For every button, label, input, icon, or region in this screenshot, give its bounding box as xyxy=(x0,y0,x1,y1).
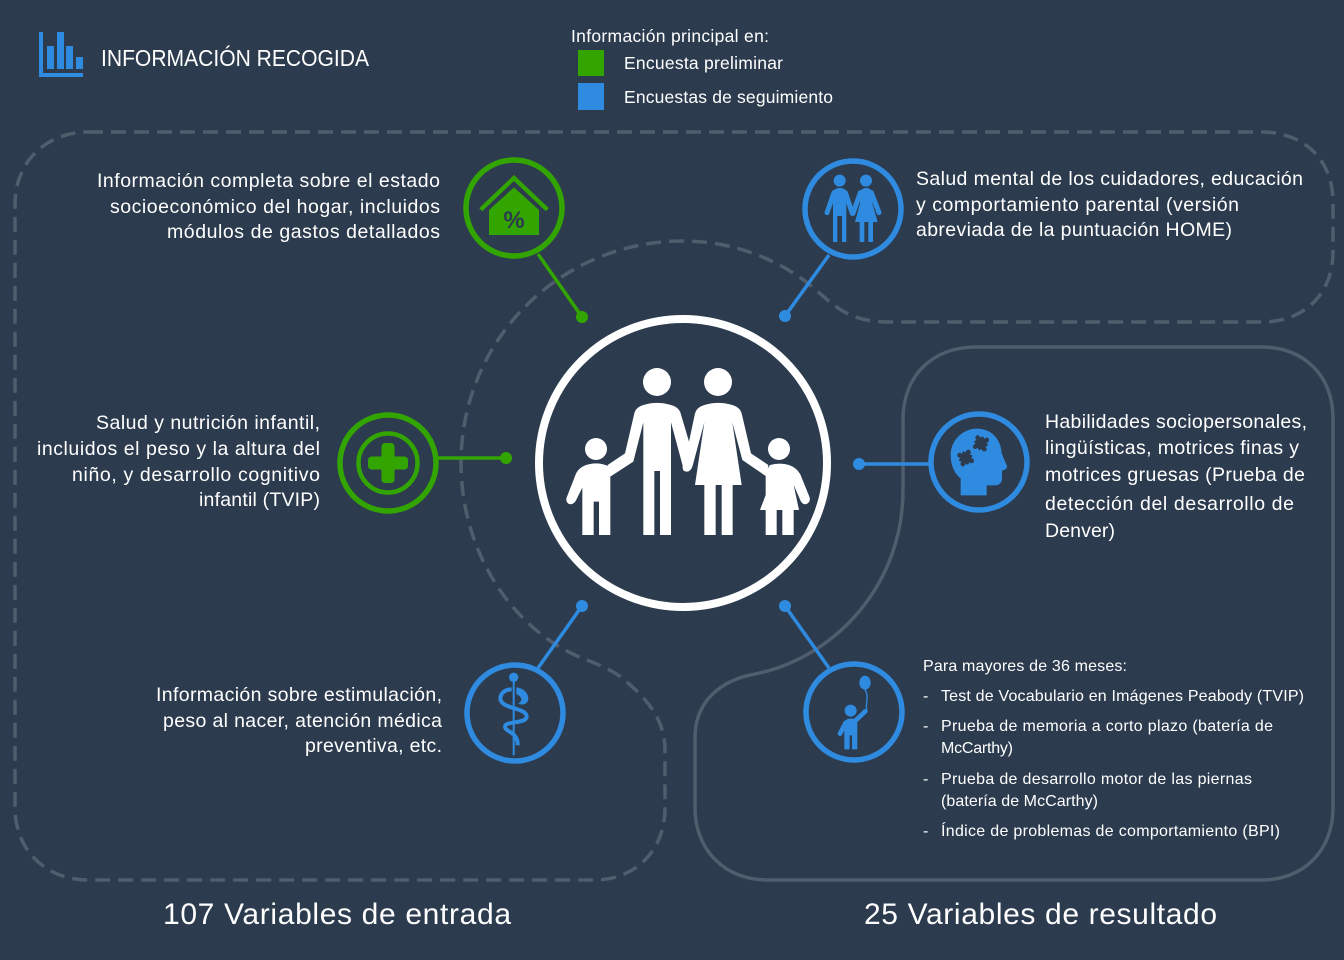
caption: outcome variables: 25 Variables de resultado xyxy=(864,898,1217,931)
connector dot xyxy=(576,600,588,612)
icon ring xyxy=(467,665,563,761)
text: caregivers info xyxy=(916,168,1303,241)
node: child health (green) xyxy=(340,415,512,511)
list item: BPI: - xyxy=(923,823,928,840)
icon ring xyxy=(340,415,436,511)
text: child health info xyxy=(37,412,320,511)
text: stimulation info xyxy=(156,684,442,757)
text: socio-personal skills info: lingüísticas, motrices finas y xyxy=(1045,437,1299,459)
text: socio-personal skills info: motrices gruesas (Prueba de xyxy=(1045,464,1305,486)
list item: memory test xyxy=(923,718,1273,757)
icon: house with percent xyxy=(481,178,547,235)
connector xyxy=(538,254,582,317)
connector xyxy=(538,606,582,668)
icon: staff with serpent xyxy=(500,673,528,755)
icon: child with balloon xyxy=(840,676,871,749)
icon ring xyxy=(931,414,1027,510)
list item: memory test: - xyxy=(923,718,928,735)
legend label: follow-up: Encuestas de seguimiento xyxy=(624,87,833,107)
connector xyxy=(859,462,930,466)
caption: input variables: 107 Variables de entrada xyxy=(163,898,511,931)
node: socio-personal skills (blue) xyxy=(853,414,1027,510)
icon ring xyxy=(806,664,902,760)
text: stimulation info: preventiva, etc. xyxy=(305,735,442,757)
text: stimulation info: peso al nacer, atención médica xyxy=(163,710,442,732)
text: caregivers info: Salud mental de los cuidadores, educación xyxy=(916,168,1303,190)
icon ring xyxy=(466,160,562,256)
central circle xyxy=(539,319,827,607)
text: socio-personal skills info: detección del desarrollo de xyxy=(1045,493,1294,515)
connector dot xyxy=(853,458,865,470)
text: household info: socioeconómico del hogar, incluidos xyxy=(110,196,440,218)
legend xyxy=(571,26,833,110)
text: child health info: incluidos el peso y la altura del xyxy=(37,438,320,460)
icon ring xyxy=(805,161,901,257)
icon: couple xyxy=(827,175,879,242)
connector dot xyxy=(500,452,512,464)
connector dot xyxy=(779,310,791,322)
dashed outline: input variables region xyxy=(15,132,1333,880)
legend heading: Información principal en: xyxy=(571,26,769,46)
connector dot xyxy=(576,311,588,323)
text: caregivers info: abreviada de la puntuación HOME) xyxy=(916,219,1232,241)
node: stimulation (blue) xyxy=(467,600,588,761)
icon: head with puzzle pieces xyxy=(951,429,1007,495)
text: household info: Información completa sobre el estado xyxy=(97,170,440,192)
list heading: Para mayores de 36 meses: xyxy=(923,658,1127,675)
legend swatch: green xyxy=(578,50,604,76)
list item: memory test: McCarthy) xyxy=(941,740,1013,757)
text: child health info: niño, y desarrollo cognitivo xyxy=(72,464,320,486)
text: child health info: infantil (TVIP) xyxy=(199,489,320,511)
icon: medical cross xyxy=(358,434,418,492)
connector xyxy=(785,606,829,668)
list item: TVIP: Test de Vocabulario en Imágenes Peabody (TVIP) xyxy=(941,688,1304,705)
text: socio-personal skills info: Habilidades sociopersonales, xyxy=(1045,411,1307,433)
central family icon xyxy=(539,319,827,607)
solid outline: outcome variables region xyxy=(695,347,1333,880)
text: outcomes list xyxy=(923,658,1304,840)
list item: TVIP: - xyxy=(923,688,928,705)
text: child health info: Salud y nutrición infantil, xyxy=(96,412,320,434)
text: socio-personal skills info xyxy=(1045,411,1307,542)
text: household info xyxy=(97,170,440,243)
node: children over 36 months (blue) xyxy=(779,600,902,760)
legend swatch: blue xyxy=(578,83,604,110)
family figures xyxy=(566,368,810,535)
text: socio-personal skills info: Denver) xyxy=(1045,520,1115,542)
list item: motor test: Prueba de desarrollo motor de las piernas xyxy=(941,771,1252,788)
node: caregivers (blue) xyxy=(779,161,901,322)
text: caregivers info: y comportamiento parental (versión xyxy=(916,194,1239,216)
connector xyxy=(785,255,829,316)
legend label: preliminary: Encuesta preliminar xyxy=(624,53,783,73)
list item: motor test xyxy=(923,771,1252,810)
text: household info: módulos de gastos detallados xyxy=(167,221,440,243)
list item: motor test: - xyxy=(923,771,928,788)
connector dot xyxy=(779,600,791,612)
connector xyxy=(436,456,506,460)
list item: memory test: Prueba de memoria a corto plazo (batería de xyxy=(941,718,1273,735)
header icon: bar chart xyxy=(39,32,83,77)
icon: house with percent: % xyxy=(503,207,525,234)
text: stimulation info: Información sobre estimulación, xyxy=(156,684,442,706)
list item: motor test: (batería de McCarthy) xyxy=(941,793,1098,810)
node: household socioeconomic (green) xyxy=(466,160,588,323)
title: INFORMACIÓN RECOGIDA xyxy=(101,45,370,71)
list item: BPI: Índice de problemas de comportamiento (BPI) xyxy=(941,821,1280,840)
